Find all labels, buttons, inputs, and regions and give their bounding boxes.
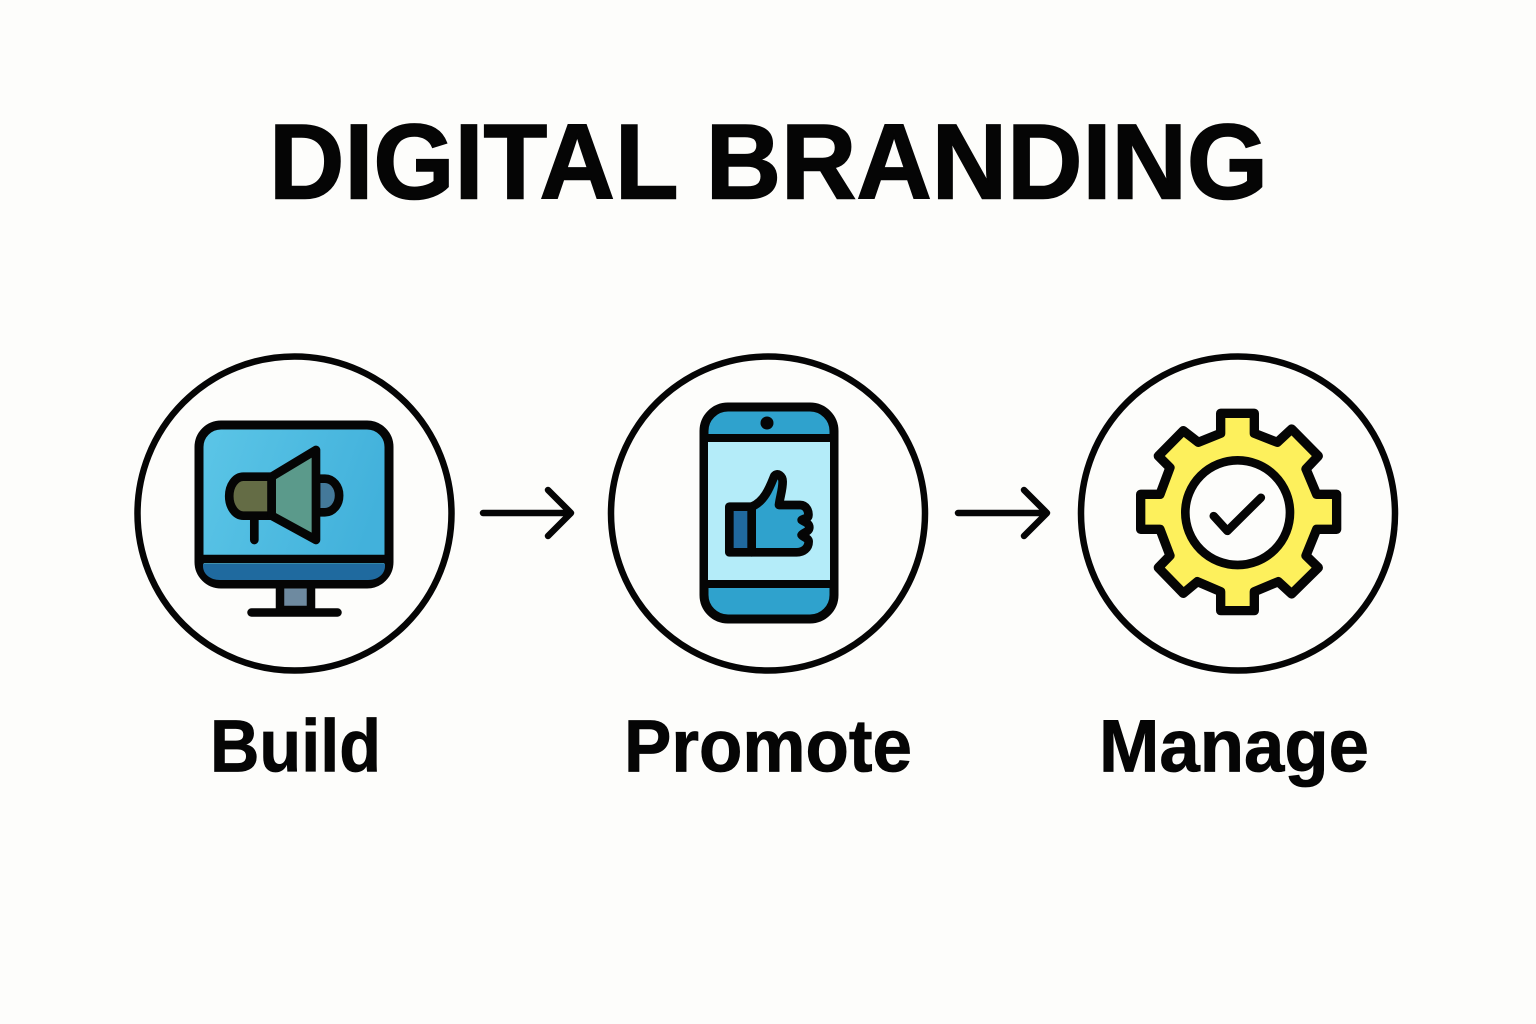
step: Build <box>138 356 452 670</box>
icon: gear with check mark <box>1141 413 1337 611</box>
step: Manage <box>1081 356 1395 670</box>
step: Promote <box>611 356 925 670</box>
circle: Build <box>138 356 452 670</box>
circle: Manage <box>1081 356 1395 670</box>
circle: Promote <box>611 356 925 670</box>
label: Promote: Promote <box>624 704 912 788</box>
icon: monitor with megaphone <box>199 425 389 612</box>
arrow: Build to Promote <box>483 490 571 536</box>
label: Manage: Manage <box>1099 704 1369 788</box>
icon: smartphone with thumbs up <box>700 407 838 619</box>
title: DIGITAL BRANDING <box>269 102 1268 222</box>
label: Build: Build <box>210 704 381 788</box>
arrow: Promote to Manage <box>958 490 1047 536</box>
